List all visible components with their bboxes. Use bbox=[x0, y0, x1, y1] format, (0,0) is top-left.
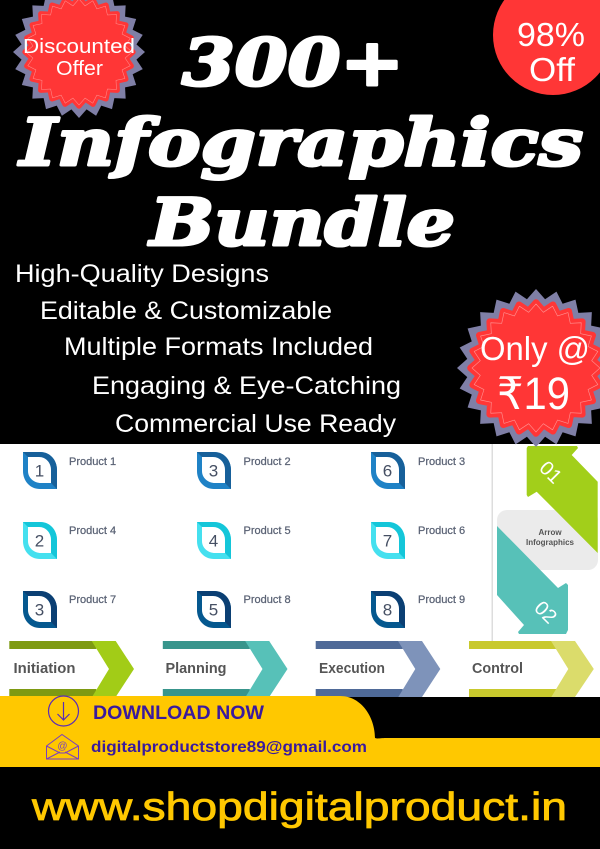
icon: download bbox=[48, 696, 78, 726]
product 6: 7 bbox=[383, 532, 392, 550]
chevron: initiation bbox=[9, 641, 134, 697]
product 9 bbox=[371, 591, 465, 628]
badge: discounted offer: Offer bbox=[56, 58, 103, 80]
feature list: Commercial Use Ready bbox=[115, 410, 397, 438]
product 5 bbox=[197, 522, 291, 559]
product 1 bbox=[23, 452, 116, 489]
arrow 01: 01 bbox=[535, 457, 566, 488]
product 2 bbox=[197, 452, 291, 489]
product 1: 1 bbox=[35, 462, 44, 480]
badge: only @ 19 bbox=[457, 289, 600, 447]
title: Infographics bbox=[18, 105, 583, 181]
chevron: execution: Execution bbox=[319, 661, 385, 677]
white product panel background bbox=[0, 444, 600, 697]
badge: discounted offer bbox=[13, 0, 145, 118]
feature list bbox=[15, 260, 401, 438]
title bbox=[18, 25, 583, 261]
badge: only @ 19: Only @ bbox=[480, 330, 590, 367]
email address: digitalproductstore89@gmail.com bbox=[91, 739, 367, 756]
product icon grid bbox=[23, 452, 465, 628]
arrow 02: 02 bbox=[530, 597, 561, 628]
icon: email envelope: @ bbox=[57, 741, 68, 752]
product 2: 3 bbox=[209, 462, 218, 480]
product 5: Product 5 bbox=[244, 525, 291, 537]
website url: www.shopdigitalproduct.in bbox=[31, 786, 567, 829]
feature list: High-Quality Designs bbox=[15, 260, 269, 288]
chevron: initiation: Initiation bbox=[14, 661, 76, 677]
badge: discounted offer: Discounted bbox=[23, 36, 135, 58]
arrow 02 bbox=[497, 526, 568, 634]
chevron: planning bbox=[163, 641, 288, 697]
icon: email envelope bbox=[46, 734, 78, 759]
product 8 bbox=[197, 591, 291, 628]
download heading: DOWNLOAD NOW bbox=[93, 702, 265, 724]
product 9: 8 bbox=[383, 600, 392, 620]
product 5: 4 bbox=[209, 532, 218, 550]
badge: 98% off: 98% bbox=[517, 16, 585, 53]
chevron: execution bbox=[316, 641, 440, 697]
product 3: 6 bbox=[383, 462, 392, 480]
yellow download banner bbox=[0, 696, 600, 767]
arrow infographic: Arrow bbox=[538, 528, 562, 537]
feature list: Editable & Customizable bbox=[40, 297, 332, 325]
title: 300+ bbox=[182, 25, 404, 101]
title: Bundle bbox=[148, 185, 455, 261]
arrow infographic: Infographics bbox=[526, 538, 575, 547]
chevron: planning: Planning bbox=[166, 661, 226, 677]
product 7: 3 bbox=[35, 600, 44, 620]
badge: 98% off bbox=[493, 0, 600, 95]
product 3 bbox=[371, 452, 465, 489]
product 1: Product 1 bbox=[69, 456, 116, 468]
badge: only @ 19: ₹19 bbox=[497, 368, 570, 419]
feature list: Multiple Formats Included bbox=[64, 333, 373, 361]
arrow infographic bbox=[497, 446, 598, 634]
product 6: Product 6 bbox=[418, 525, 465, 537]
product 9: Product 9 bbox=[418, 594, 465, 606]
product 8: Product 8 bbox=[244, 594, 291, 606]
feature list: Engaging & Eye-Catching bbox=[92, 372, 401, 400]
product 4: Product 4 bbox=[69, 525, 116, 537]
product 3: Product 3 bbox=[418, 456, 465, 468]
product 8: 5 bbox=[209, 600, 218, 620]
product 2: Product 2 bbox=[244, 456, 291, 468]
product 4 bbox=[23, 522, 116, 559]
arrow 01 bbox=[527, 446, 598, 553]
chevron: control bbox=[469, 641, 594, 697]
badge: 98% off: Off bbox=[529, 51, 576, 88]
product 7 bbox=[23, 591, 116, 628]
product 4: 2 bbox=[35, 532, 44, 550]
product 7: Product 7 bbox=[69, 594, 116, 606]
chevron: control: Control bbox=[472, 661, 523, 677]
product 6 bbox=[371, 522, 465, 559]
